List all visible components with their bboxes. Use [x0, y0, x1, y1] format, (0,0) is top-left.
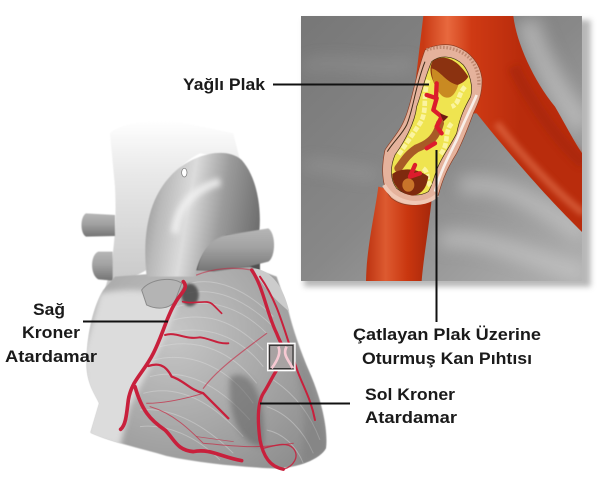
label: Yağlı Plak: Yağlı Plak	[183, 75, 266, 94]
label: Sağ Kroner Atardamar: Sağ	[33, 300, 65, 319]
label: Çatlayan Plak Üzerine Oturmuş Kan Pıhtısı: Oturmuş Kan Pıhtısı	[362, 349, 532, 368]
lower dark lumen	[392, 169, 428, 196]
pale cut edge at bottom	[384, 185, 437, 203]
right atrium, pale	[83, 290, 177, 447]
dark clot core	[440, 113, 448, 122]
dark gap behind the trunk	[193, 217, 260, 277]
great vessels, pale rear part	[103, 120, 240, 293]
pulmonary trunk	[197, 228, 274, 272]
leader line: Sağ Kroner	[83, 320, 168, 322]
lower artery	[366, 187, 432, 281]
branch shadow	[513, 67, 583, 163]
label: Çatlayan Plak Üzerine Oturmuş Kan Pıhtısı: Çatlayan Plak Üzerine	[353, 325, 541, 344]
coronary artery network	[121, 268, 315, 469]
dark base of the coronary	[181, 284, 199, 306]
leader line: Sol Kroner	[260, 402, 350, 404]
atrial appendage	[142, 279, 182, 308]
heart illustration	[81, 120, 328, 470]
label: Sağ Kroner Atardamar	[5, 300, 97, 366]
label: Sağ Kroner Atardamar: Atardamar	[5, 347, 97, 366]
pale yellow plaque lumps	[398, 80, 465, 187]
left pulmonary stub lower	[92, 252, 113, 281]
panel background	[301, 16, 582, 281]
leader line: Yağlı Plak	[273, 84, 429, 86]
panel shadow	[304, 20, 591, 287]
inset panel: ruptured plaque in artery	[301, 16, 591, 287]
wall texture	[427, 47, 479, 87]
yellow fatty lumen	[391, 57, 472, 195]
red blood clot	[410, 83, 442, 177]
leader line: Çatlayan Plak	[436, 150, 438, 322]
orange plaque core	[432, 68, 458, 98]
aorta highlight	[175, 182, 220, 233]
label: Sol Kroner Atardamar: Sol Kroner	[365, 385, 455, 404]
label: Sağ Kroner Atardamar: Kroner	[22, 323, 80, 342]
upper artery and right branch	[413, 16, 583, 233]
label: Sol Kroner Atardamar	[365, 385, 457, 427]
small white mark on aorta	[182, 168, 187, 177]
ventricle muscle fibres	[140, 282, 320, 463]
wall left dark line	[387, 62, 425, 152]
left anterior descending	[252, 270, 285, 469]
right edge shading	[296, 352, 326, 464]
branch highlight	[497, 123, 583, 213]
aortic arch	[145, 153, 260, 277]
heart body	[87, 267, 326, 468]
cut vessel wall	[383, 45, 482, 205]
left pulmonary stub upper	[81, 213, 115, 237]
highlighted plaque site box	[268, 343, 295, 371]
background folds	[438, 16, 582, 278]
label: Sol Kroner Atardamar: Atardamar	[365, 408, 457, 427]
dark shading on ventricle	[230, 375, 264, 447]
wall inner pale line	[435, 95, 477, 192]
dark upper lumen	[430, 58, 468, 85]
label: Çatlayan Plak Üzerine Oturmuş Kan Pıhtısı	[353, 325, 541, 368]
top right appendage	[253, 268, 289, 312]
orange spot	[402, 178, 414, 192]
brown channel	[398, 123, 440, 168]
